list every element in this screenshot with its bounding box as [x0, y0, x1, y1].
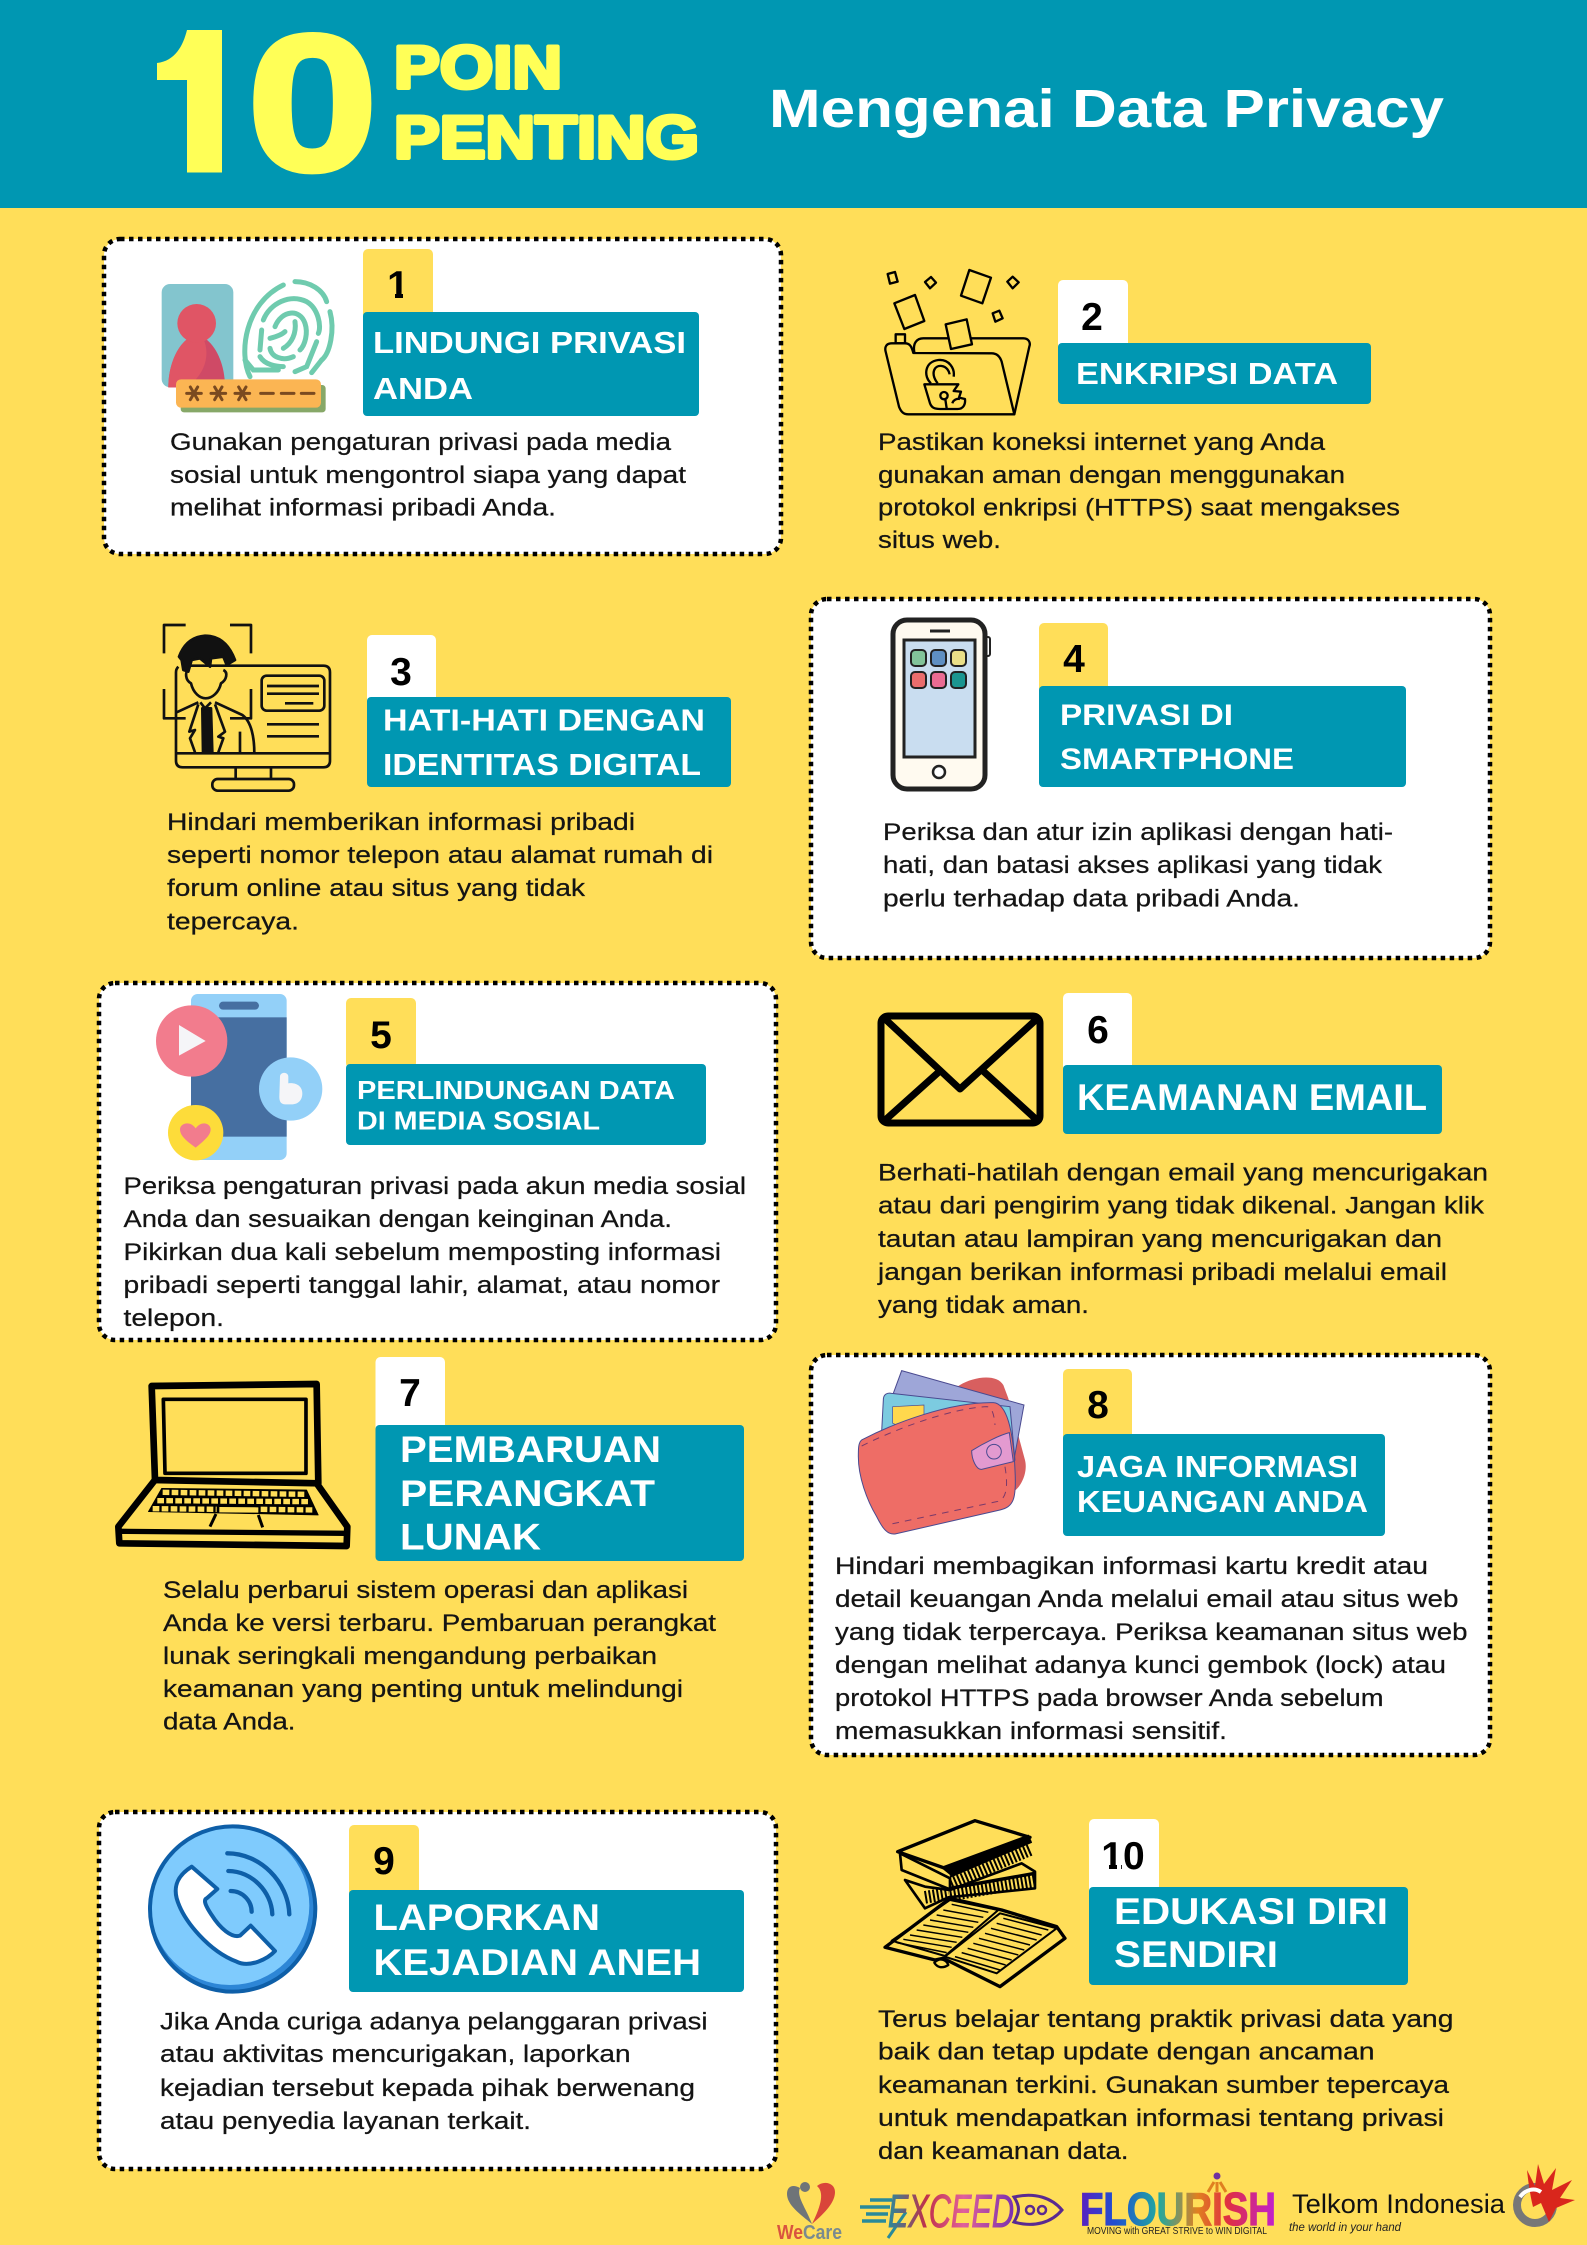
body text 4: [883, 819, 1393, 912]
panel 6: keamanan email: [877, 993, 1488, 1319]
title number 10: [125, 0, 378, 212]
logo: FLOURISH: [1080, 2172, 1276, 2237]
body text 1: melihat informasi pribadi Anda.: [170, 494, 556, 522]
heading 4: SMARTPHONE: [1060, 743, 1294, 776]
panel 2: enkripsi data: [878, 270, 1400, 554]
logo: WeCare: WeCare: [777, 2222, 842, 2244]
body text 9: Jika Anda curiga adanya pelanggaran privasi: [160, 2009, 708, 2036]
body text 9: atau penyedia layanan terkait.: [160, 2108, 531, 2135]
logo: EXCEED: EXCEED: [888, 2185, 1014, 2237]
heading 5: [346, 1064, 706, 1145]
icon: laptop: [118, 1384, 347, 1546]
body text 9: kejadian tersebut kepada pihak berwenang: [160, 2075, 695, 2102]
body text 10: [878, 2006, 1453, 2165]
number badge 8: 8: [1087, 1384, 1109, 1427]
icon: phone with social bubbles: [156, 994, 322, 1160]
body text 3: [167, 809, 713, 936]
icon: person on monitor: [164, 625, 330, 791]
body text 3: seperti nomor telepon atau alamat rumah di: [167, 842, 713, 869]
logo: Telkom Indonesia: [1289, 2164, 1575, 2234]
number badge 6: [1063, 993, 1132, 1071]
body text 5: Anda dan sesuaikan dengan keinginan Anda.: [124, 1206, 672, 1233]
body text 1: Gunakan pengaturan privasi pada media: [170, 429, 671, 456]
heading 3: HATI-HATI DENGAN: [383, 702, 705, 738]
heading 2: [1058, 343, 1371, 404]
body text 5: Pikirkan dua kali sebelum memposting informasi: [124, 1239, 721, 1266]
body text 8: Hindari membagikan informasi kartu kredit atau: [835, 1553, 1428, 1580]
body text 5: pribadi seperti tanggal lahir, alamat, atau nomor: [124, 1272, 720, 1299]
heading 9: KEJADIAN ANEH: [374, 1942, 701, 1983]
heading 8: JAGA INFORMASI: [1077, 1449, 1358, 1484]
body text 8: memasukkan informasi sensitif.: [835, 1718, 1227, 1745]
subtitle: Mengenai Data Privacy: [769, 79, 1444, 139]
body text 2: Pastikan koneksi internet yang Anda: [878, 429, 1325, 456]
body text 8: protokol HTTPS pada browser Anda sebelum: [835, 1685, 1384, 1712]
body text 4: hati, dan batasi akses aplikasi yang tidak: [883, 852, 1383, 879]
body text 8: [835, 1553, 1468, 1745]
body text 6: [877, 1160, 1488, 1319]
panel 7: pembaruan perangkat lunak: [118, 1357, 744, 1736]
icon: wallet with cards: [858, 1371, 1026, 1534]
body text 7: Selalu perbarui sistem operasi dan aplikasi: [163, 1577, 688, 1604]
panel 1: lindungi privasi: [104, 239, 781, 554]
body text 10: Terus belajar tentang praktik privasi data yang: [878, 2006, 1453, 2033]
body text 6: yang tidak aman.: [878, 1292, 1089, 1319]
heading 3: [367, 697, 731, 787]
icon: folder with lock: [885, 270, 1030, 414]
body text 7: [163, 1577, 716, 1736]
icon: envelope: [881, 1016, 1040, 1123]
number badge 5: [346, 998, 416, 1068]
body text 8: yang tidak terpercaya. Periksa keamanan situs web: [835, 1619, 1468, 1646]
number badge 4: 4: [1063, 638, 1085, 681]
heading 1: [363, 312, 699, 416]
body text 10: keamanan terkini. Gunakan sumber tepercaya: [878, 2072, 1449, 2099]
number badge 8: [1063, 1369, 1132, 1441]
icon: smartphone: [893, 620, 990, 789]
number badge 4: [1039, 623, 1108, 693]
heading 10: EDUKASI DIRI: [1114, 1891, 1388, 1932]
heading 7: LUNAK: [400, 1516, 541, 1558]
panel 8: jaga informasi keuangan: [811, 1355, 1490, 1755]
number badge 7: 7: [399, 1372, 421, 1415]
body text 6: tautan atau lampiran yang mencurigakan dan: [878, 1226, 1442, 1253]
body text 10: baik dan tetap update dengan ancaman: [878, 2039, 1374, 2066]
body text 2: [878, 429, 1400, 554]
heading 7: [376, 1425, 744, 1561]
body text 10: untuk mendapatkan informasi tentang privasi: [878, 2105, 1444, 2132]
heading 2: ENKRIPSI DATA: [1076, 356, 1338, 391]
body text 9: atau aktivitas mencurigakan, laporkan: [160, 2041, 631, 2068]
body text 7: keamanan yang penting untuk melindungi: [163, 1676, 683, 1703]
body text 3: forum online atau situs yang tidak: [167, 875, 586, 902]
body text 1: [170, 429, 686, 522]
icon: profile and fingerprint: [162, 282, 332, 412]
title POIN PENTING: POIN: [394, 34, 562, 101]
body text 3: Hindari memberikan informasi pribadi: [167, 809, 635, 836]
panel 9: laporkan kejadian aneh: [99, 1812, 776, 2169]
number badge 6: 6: [1087, 1009, 1109, 1052]
panel 5: media sosial: [99, 983, 776, 1340]
logo: FLOURISH: MOVING with GREAT STRIVE to WIN DIGITAL: [1087, 2225, 1267, 2237]
body text 7: Anda ke versi terbaru. Pembaruan perangkat: [163, 1610, 716, 1637]
body text 3: tepercaya.: [167, 908, 299, 936]
title POIN PENTING: PENTING: [394, 104, 699, 171]
body text 4: Periksa dan atur izin aplikasi dengan hati-: [883, 819, 1393, 846]
heading 4: [1039, 686, 1406, 787]
number badge 3: [367, 635, 436, 705]
title number 10: 0: [247, 0, 378, 212]
number badge 3: 3: [390, 651, 412, 694]
heading 9: [349, 1890, 744, 1992]
body text 8: dengan melihat adanya kunci gembok (lock) atau: [835, 1652, 1446, 1679]
body text 5: Periksa pengaturan privasi pada akun media sosial: [124, 1173, 746, 1200]
heading 8: [1063, 1434, 1385, 1536]
logo: WeCare: [777, 2182, 842, 2244]
heading 5: DI MEDIA SOSIAL: [357, 1106, 600, 1136]
heading 10: [1089, 1887, 1408, 1985]
number badge 2: [1058, 280, 1128, 350]
body text 1: sosial untuk mengontrol siapa yang dapat: [170, 462, 686, 489]
body text 7: lunak seringkali mengandung perbaikan: [163, 1643, 657, 1670]
icon: stacked books: [885, 1821, 1065, 1987]
panel 10: edukasi diri sendiri: [878, 1819, 1453, 2165]
heading 9: LAPORKAN: [374, 1897, 600, 1938]
heading 6: KEAMANAN EMAIL: [1077, 1077, 1427, 1118]
heading 10: SENDIRI: [1114, 1934, 1278, 1975]
number badge 1: 1: [387, 264, 409, 307]
number badge 10: [1089, 1819, 1159, 1895]
panel 4: privasi di smartphone: [811, 599, 1490, 958]
heading 6: [1063, 1065, 1442, 1134]
number badge 10: 10: [1101, 1835, 1145, 1878]
icon: phone call: [150, 1826, 315, 1992]
body text 8: detail keuangan Anda melalui email atau situs web: [835, 1586, 1458, 1613]
body text 7: data Anda.: [163, 1708, 296, 1736]
logo: Telkom Indonesia: the world in your hand: [1289, 2220, 1401, 2234]
body text 5: telepon.: [124, 1305, 224, 1332]
body text 2: situs web.: [878, 527, 1001, 554]
body text 4: perlu terhadap data pribadi Anda.: [883, 886, 1300, 912]
heading 7: PERANGKAT: [400, 1473, 655, 1514]
number badge 1: [363, 249, 433, 319]
number badge 5: 5: [370, 1014, 392, 1057]
number badge 7: [376, 1357, 445, 1435]
footer logos: [777, 2164, 1575, 2244]
body text 9: [160, 2009, 708, 2135]
logo: Telkom Indonesia: Telkom Indonesia: [1292, 2189, 1506, 2219]
body text 6: atau dari pengirim yang tidak dikenal. Jangan klik: [878, 1193, 1485, 1220]
number badge 9: 9: [373, 1840, 395, 1883]
body text 6: jangan berikan informasi pribadi melalui email: [877, 1259, 1447, 1286]
heading 7: PEMBARUAN: [400, 1429, 661, 1470]
heading 3: IDENTITAS DIGITAL: [383, 747, 701, 782]
heading 5: PERLINDUNGAN DATA: [357, 1075, 675, 1105]
heading 1: ANDA: [373, 371, 473, 406]
logo: FLOURISH: FLOURISH: [1080, 2183, 1276, 2235]
number badge 9: [349, 1825, 419, 1897]
header banner: [0, 0, 1587, 212]
panel 3: identitas digital: [164, 625, 731, 936]
heading 8: KEUANGAN ANDA: [1077, 1484, 1368, 1519]
title number 10: 1: [150, 0, 258, 212]
title POIN PENTING: [394, 34, 699, 171]
heading 4: PRIVASI DI: [1060, 699, 1233, 732]
body text 5: [124, 1173, 746, 1332]
body text 10: dan keamanan data.: [878, 2138, 1128, 2165]
body text 2: protokol enkripsi (HTTPS) saat mengakses: [878, 494, 1400, 522]
body text 6: Berhati-hatilah dengan email yang mencurigakan: [878, 1160, 1488, 1186]
number badge 2: 2: [1081, 296, 1103, 339]
heading 1: LINDUNGI PRIVASI: [373, 325, 686, 360]
body text 2: gunakan aman dengan menggunakan: [878, 462, 1345, 489]
